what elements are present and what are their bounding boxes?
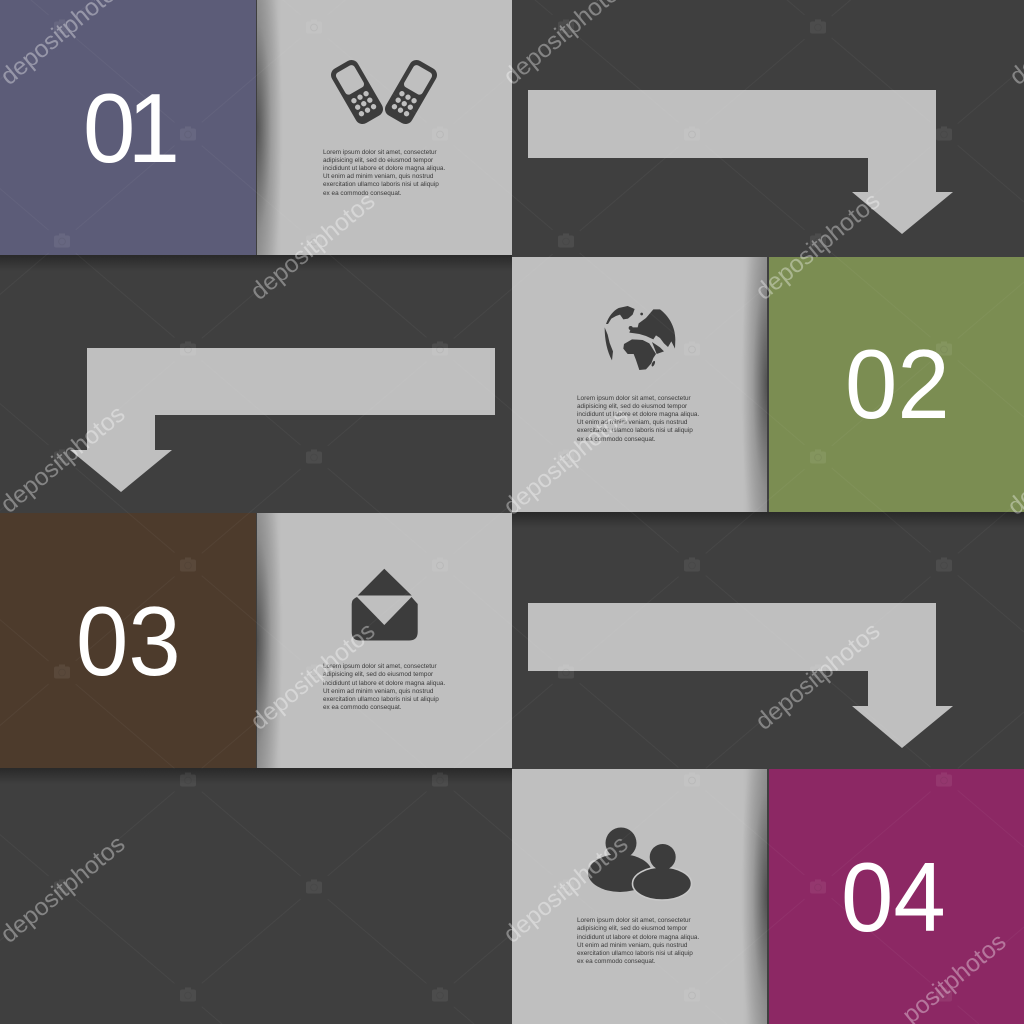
panel: step 01 content (257, 0, 512, 255)
text: step 01 body: Lorem ipsum dolor sit amet, consectetur (323, 149, 437, 156)
text: step 02 body: incididunt ut labore et dolore magna aliqua. (577, 411, 699, 418)
text: step 03 body: adipisicing elit, sed do eiusmod tempor (323, 671, 433, 678)
icon: envelope (352, 569, 418, 640)
arrow: step 01 to 02 (528, 90, 953, 234)
text: step 03 body: exercitation ullamco laboris nisi ut aliquip (323, 696, 439, 703)
panel: step 04 content (512, 769, 767, 1024)
text: step 02 body: exercitation ullamco laboris nisi ut aliquip (577, 427, 693, 434)
watermark 9: depositphotos (246, 618, 380, 736)
number 04: 04 (841, 842, 946, 952)
text: step 03 body: ex ea commodo consequat. (323, 704, 402, 711)
text: step 02 body (577, 395, 699, 443)
number 01: 01 (83, 73, 172, 183)
panel: step 02 content (512, 257, 767, 512)
text: step 04 body: ex ea commodo consequat. (577, 958, 656, 965)
watermark 12: depositphotos (499, 831, 633, 949)
panel: step 03 colour block (0, 513, 256, 768)
panel: step 04 colour block (769, 769, 1024, 1024)
watermark 4: depositphotos (246, 188, 380, 306)
text: step 04 body: exercitation ullamco laboris nisi ut aliquip (577, 950, 693, 957)
text: step 01 body (323, 149, 445, 197)
arrow: step 03 to 04 (528, 603, 953, 748)
text: step 03 body (323, 663, 445, 711)
number 02: 02 (845, 329, 950, 439)
watermark 10: depositphotos (751, 618, 885, 736)
text: step 03 body: Lorem ipsum dolor sit amet, consectetur (323, 663, 437, 670)
text: step 01 body: Ut enim ad minim veniam, quis nostrud (323, 173, 433, 180)
text: step 04 body: adipisicing elit, sed do eiusmod tempor (577, 925, 687, 932)
text: step 02 body: ex ea commodo consequat. (577, 436, 656, 443)
text: step 02 body: adipisicing elit, sed do eiusmod tempor (577, 403, 687, 410)
arrow: step 02 to 03 (70, 348, 495, 492)
watermark 7: depositphotos (499, 403, 633, 521)
text: step 02 body: Lorem ipsum dolor sit amet, consectetur (577, 395, 691, 402)
panel: step 01 colour block (0, 0, 256, 255)
text: step 02 body: Ut enim ad minim veniam, quis nostrud (577, 419, 687, 426)
panel: step 03 content (257, 513, 512, 768)
panel: step 02 colour block (769, 257, 1024, 512)
icon: mobile phones (328, 57, 440, 127)
watermark 5: depositphotos (751, 188, 885, 306)
text: step 01 body: ex ea commodo consequat. (323, 190, 402, 197)
number 03: 03 (76, 586, 181, 696)
icon: globe (605, 306, 675, 370)
text: step 04 body: incididunt ut labore et dolore magna aliqua. (577, 934, 699, 941)
text: step 01 body: exercitation ullamco laboris nisi ut aliquip (323, 181, 439, 188)
text: step 03 body: Ut enim ad minim veniam, quis nostrud (323, 688, 433, 695)
text: step 04 body: Ut enim ad minim veniam, quis nostrud (577, 942, 687, 949)
text: step 03 body: incididunt ut labore et dolore magna aliqua. (323, 680, 445, 687)
text: step 01 body: adipisicing elit, sed do eiusmod tempor (323, 157, 433, 164)
icon: people (588, 828, 692, 900)
text: step 01 body: incididunt ut labore et dolore magna aliqua. (323, 165, 445, 172)
text: step 04 body (577, 917, 699, 965)
text: step 04 body: Lorem ipsum dolor sit amet, consectetur (577, 917, 691, 924)
